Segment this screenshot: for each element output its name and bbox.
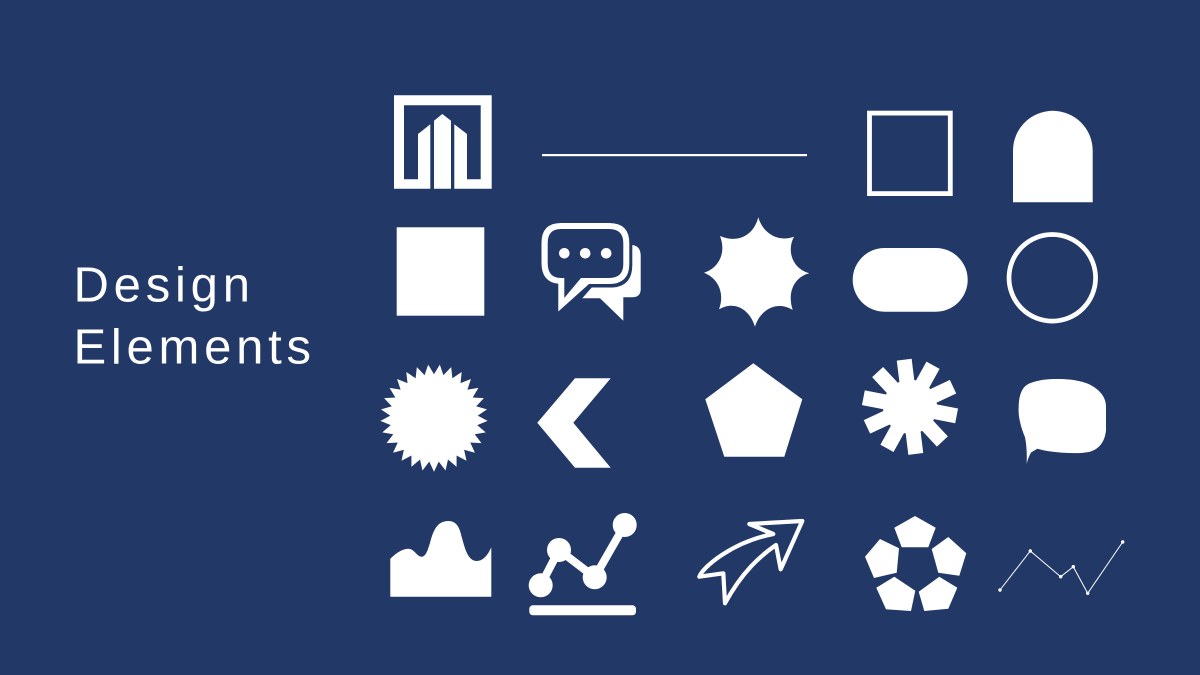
starburst [380, 364, 488, 472]
horizontal line [542, 154, 807, 156]
icon: hand-drawn arrow [699, 521, 802, 603]
filled square [397, 227, 484, 316]
title: Elements [74, 320, 311, 374]
icon: building logo [394, 95, 492, 189]
pill shape [853, 248, 968, 312]
outlined circle [1009, 234, 1096, 321]
chevron arrow [537, 378, 611, 468]
icon: chat bubbles [542, 223, 641, 321]
title [74, 259, 311, 374]
thin line chart [998, 540, 1124, 595]
asterisk burst [862, 359, 958, 455]
speech bubble blob [1019, 379, 1106, 464]
title: Design [74, 259, 250, 313]
eight-point star [704, 217, 809, 327]
pentagon [705, 363, 802, 457]
icon: line chart with nodes [529, 513, 637, 615]
pentagon ring [865, 516, 966, 611]
outlined square [870, 113, 950, 194]
mountain area chart [390, 521, 491, 597]
arch shape [1013, 111, 1093, 202]
